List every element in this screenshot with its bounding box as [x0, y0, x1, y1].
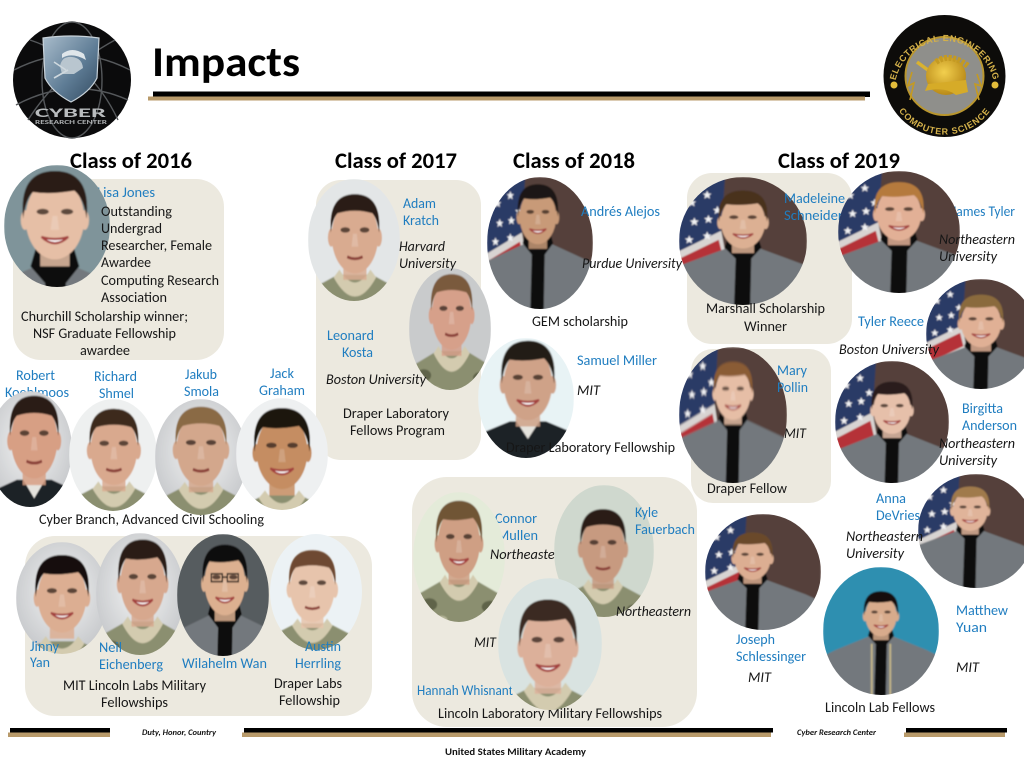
school: MIT (Matthew): MIT — [956, 659, 980, 676]
name: Adam Kratch: Kratch — [403, 212, 439, 229]
school: Harvard University: Harvard — [399, 238, 445, 255]
name: Richard Shmel — [94, 368, 137, 402]
heading: Class of 2018: Class of 2018 — [513, 147, 635, 174]
photo: Samuel Miller — [478, 338, 574, 458]
name: Neil Eichenberg — [99, 639, 163, 673]
caption: Draper Labs Fellowship — [274, 675, 342, 709]
name: Robert Koehlmoos — [5, 367, 69, 401]
name: Madeleine Schneider: Schneider — [784, 207, 843, 224]
name: Mary Pollin: Pollin — [777, 379, 808, 396]
school: MIT (Hannah): MIT — [474, 634, 497, 651]
name: Richard Shmel: Shmel — [99, 385, 134, 402]
photo: Jakub Smola — [155, 399, 242, 515]
school: Northeastern University (Birgitta): University — [939, 452, 998, 469]
name: Matthew Yuan: Matthew — [956, 602, 1008, 619]
logo: Electrical Engineering and Computer Science — [884, 15, 1006, 137]
name: Kyle Fauerbach: Fauerbach — [635, 521, 695, 538]
name: Kyle Fauerbach: Kyle — [635, 504, 658, 521]
logo: Electrical Engineering and Computer Science: COMPUTER SCIENCE — [900, 108, 990, 135]
school: MIT (Joseph): MIT — [748, 669, 772, 686]
name: Hannah Whisnant: Hannah Whisnant — [417, 682, 513, 699]
logo: Cyber Research Center — [13, 22, 131, 138]
name: Leonard Kosta: Kosta — [342, 344, 373, 361]
school: Harvard University: University — [399, 255, 457, 272]
name: Jack Graham: Jack — [270, 365, 295, 382]
name: Connor Mullen: Mullen — [497, 527, 538, 544]
panel: 2016 Lincoln and Draper fellowships — [25, 536, 372, 716]
name: Anna DeVries — [876, 490, 920, 524]
photo: Neil Eichenberg — [96, 533, 180, 655]
name: Robert Koehlmoos: Koehlmoos — [5, 384, 69, 401]
name: Samuel Miller: Samuel Miller — [577, 352, 657, 369]
name: Adam Kratch — [403, 195, 439, 229]
photo: Mary Pollin — [679, 347, 787, 483]
caption: Draper Laboratory Fellows Program: Draper Laboratory — [343, 405, 450, 422]
photo: Leonard Kosta — [409, 268, 491, 390]
school: Northeastern University (Anna): Northeastern — [846, 528, 923, 545]
name: Jakub Smola — [184, 366, 219, 400]
photo: Austin Herrling — [270, 534, 362, 650]
name: Joseph Schlessinger: Schlessinger — [736, 648, 806, 665]
text: Lisa Jones achievements: Association — [101, 289, 167, 306]
name: Neil Eichenberg: Neil — [99, 639, 122, 656]
caption: GEM scholarship: GEM scholarship — [532, 313, 628, 330]
name: Andrés Alejos: Andrés Alejos — [581, 203, 660, 220]
school: Northeastern (Kyle): Northeastern — [616, 603, 691, 620]
school: Harvard University — [399, 238, 457, 272]
caption: Draper Laboratory Fellowship: Draper Laboratory Fellowship — [506, 439, 675, 456]
name: Birgitta Anderson: Anderson — [962, 417, 1017, 434]
heading: Class of 2019: Class of 2019 — [778, 147, 900, 174]
name: Richard Shmel: Richard — [94, 368, 137, 385]
panel: Madeleine Schneider — [687, 173, 852, 344]
text: Lisa Jones achievements: Outstanding — [101, 203, 172, 220]
photo: Birgitta Anderson — [835, 361, 949, 483]
caption: Draper Fellow: Draper Fellow — [707, 480, 787, 497]
text: Lisa Jones achievements: Researcher, Female — [101, 237, 212, 254]
footer rule center — [242, 728, 773, 737]
name: Leonard Kosta: Leonard — [327, 327, 374, 344]
footer rule right — [904, 728, 1007, 737]
name: Jinny Yan — [30, 638, 60, 671]
name: Madeleine Schneider: Madeleine — [784, 190, 845, 207]
text: Churchill and NSF awards: NSF Graduate Fellowship — [33, 325, 176, 342]
logo: Cyber Research Center: RESEARCH CENTER — [35, 120, 109, 126]
name: Austin Herrling — [295, 638, 341, 672]
photo: Robert Koehlmoos — [0, 391, 71, 507]
title: Impacts — [152, 37, 300, 88]
name: Jakub Smola: Jakub — [185, 366, 217, 383]
photo: Kyle Fauerbach — [554, 485, 654, 617]
name: Kyle Fauerbach — [635, 504, 695, 538]
photo: Matthew Yuan — [823, 567, 939, 695]
panel: Lisa Jones — [13, 179, 224, 360]
photo: Andrés Alejos — [487, 177, 593, 309]
caption: Draper Labs Fellowship: Fellowship — [279, 692, 340, 709]
name: Connor Mullen: Connor — [495, 510, 537, 527]
photo: Connor Mullen — [420, 499, 504, 622]
name: Matthew Yuan: Yuan — [956, 619, 987, 636]
name: Birgitta Anderson: Birgitta — [962, 400, 1003, 417]
school: Boston University (Tyler): Boston University — [839, 341, 940, 358]
footer rule left — [8, 728, 110, 737]
school: Northeastern University (James) — [939, 231, 1015, 265]
name: Jinny Yan: Yan — [30, 654, 50, 671]
caption: Lincoln Laboratory Military Fellowships: Lincoln Laboratory Military Fellowships — [438, 705, 662, 722]
caption: MIT Lincoln Labs Military Fellowships — [63, 677, 207, 711]
photo: Richard Shmel — [69, 399, 156, 511]
caption: MIT Lincoln Labs Military Fellowships: MIT Lincoln Labs Military — [63, 677, 207, 694]
name: Adam Kratch: Adam — [403, 195, 436, 212]
photo: Anna DeVries — [918, 474, 1024, 588]
caption: Draper Laboratory Fellows Program — [343, 405, 450, 439]
name: Leonard Kosta — [327, 327, 374, 361]
school: Northeastern University (Anna) — [846, 528, 923, 562]
text: Lisa Jones achievements: Awardee — [101, 254, 151, 271]
text: Churchill and NSF awards: Churchill Scholarship winner; — [21, 308, 188, 325]
school: Northeastern University (Birgitta) — [939, 435, 1015, 469]
name: Wilahelm Wan: Wilahelm Wan — [182, 655, 267, 672]
photo: Hannah Whisnant — [498, 578, 602, 710]
name: Mary Pollin — [777, 362, 808, 396]
photo: Joseph Schlessinger — [705, 514, 821, 630]
photo: Jinny Yan — [16, 542, 102, 654]
school: Northeastern University (James): University — [939, 248, 998, 265]
school: Boston University (Leonard): Boston University — [326, 371, 427, 388]
school: MIT (Mary): MIT — [784, 425, 807, 442]
name: Robert Koehlmoos: Robert — [16, 367, 55, 384]
caption: Marshall Scholarship Winner — [706, 300, 825, 335]
school: Northeastern (Connor): Northeastern — [490, 546, 567, 563]
name: Joseph Schlessinger: Joseph — [736, 631, 775, 648]
footer: United States Military Academy: United States Military Academy — [445, 745, 586, 758]
name: Tyler Reece: Tyler Reece — [858, 313, 924, 330]
text: Lisa Jones achievements: Computing Research — [101, 272, 219, 289]
photo: Tyler Reece — [926, 279, 1024, 389]
heading: Class of 2016: Class of 2016 — [70, 147, 192, 174]
name: Anna DeVries: Anna — [876, 490, 906, 507]
logo: Electrical Engineering and Computer Science: ELECTRICAL ENGINEERING — [890, 34, 999, 80]
photo: Lisa Jones — [4, 165, 110, 287]
logo: Cyber Research Center: CYBER — [35, 104, 107, 121]
photo: Adam Kratch — [308, 179, 399, 301]
name: Jack Graham: Graham — [259, 382, 305, 399]
text: Churchill and NSF awards: awardee — [80, 342, 130, 359]
school: Northeastern University (Birgitta): Northeastern — [939, 435, 1015, 452]
school: MIT (Samuel): MIT — [577, 382, 601, 399]
name: James Tyler: James Tyler — [952, 203, 1015, 220]
name: Madeleine Schneider — [784, 190, 845, 224]
heading: Class of 2017: Class of 2017 — [335, 147, 457, 174]
caption: Draper Laboratory Fellows Program: Fellows Program — [350, 422, 445, 439]
caption: MIT Lincoln Labs Military Fellowships: Fellowships — [101, 694, 168, 711]
text: Lisa Jones achievements: Undergrad — [101, 220, 162, 237]
name: Matthew Yuan — [956, 602, 1008, 636]
name: Anna DeVries: DeVries — [876, 507, 920, 524]
panel: Lincoln Laboratory fellowships — [412, 477, 697, 727]
school: Northeastern University (Anna): University — [846, 545, 905, 562]
panel: Class of 2017 — [316, 180, 481, 460]
name: Joseph Schlessinger — [736, 631, 806, 665]
caption: Marshall Scholarship Winner: Winner — [744, 318, 787, 335]
school: Northeastern University (James): Northeastern — [939, 231, 1015, 248]
caption: Lincoln Lab Fellows: Lincoln Lab Fellows — [825, 699, 935, 716]
name: Jakub Smola: Smola — [184, 383, 219, 400]
text: Lisa Jones achievements — [101, 203, 219, 306]
caption: Draper Labs Fellowship: Draper Labs — [274, 675, 342, 692]
name: Jinny Yan: Jinny — [30, 638, 60, 655]
photo: Madeleine Schneider — [679, 177, 807, 305]
name: Birgitta Anderson — [962, 400, 1017, 434]
footer: Cyber Research Center: Cyber Research Center — [797, 728, 877, 738]
caption: Marshall Scholarship Winner: Marshall Scholarship — [706, 300, 825, 317]
text: Churchill and NSF awards — [21, 308, 188, 359]
name: Jack Graham — [259, 365, 305, 399]
photo: James Tyler — [838, 171, 960, 293]
name: Austin Herrling: Austin — [305, 638, 341, 655]
panel: Mary Pollin — [691, 349, 831, 503]
photo: Jack Graham — [236, 398, 328, 510]
name: Mary Pollin: Mary — [777, 362, 808, 379]
footer: Duty, Honor, Country: Duty, Honor, Country — [142, 728, 217, 738]
name: Lisa Jones: Lisa Jones — [97, 184, 155, 201]
title rule — [148, 92, 870, 100]
name: Connor Mullen — [495, 510, 538, 544]
name: Austin Herrling: Herrling — [295, 655, 341, 672]
school: Purdue University: Purdue University — [582, 255, 683, 272]
name: Neil Eichenberg: Eichenberg — [99, 656, 163, 673]
caption: Cyber Branch: Cyber Branch, Advanced Civil Schooling — [39, 511, 264, 528]
photo: Wilahelm Wan — [177, 534, 269, 656]
